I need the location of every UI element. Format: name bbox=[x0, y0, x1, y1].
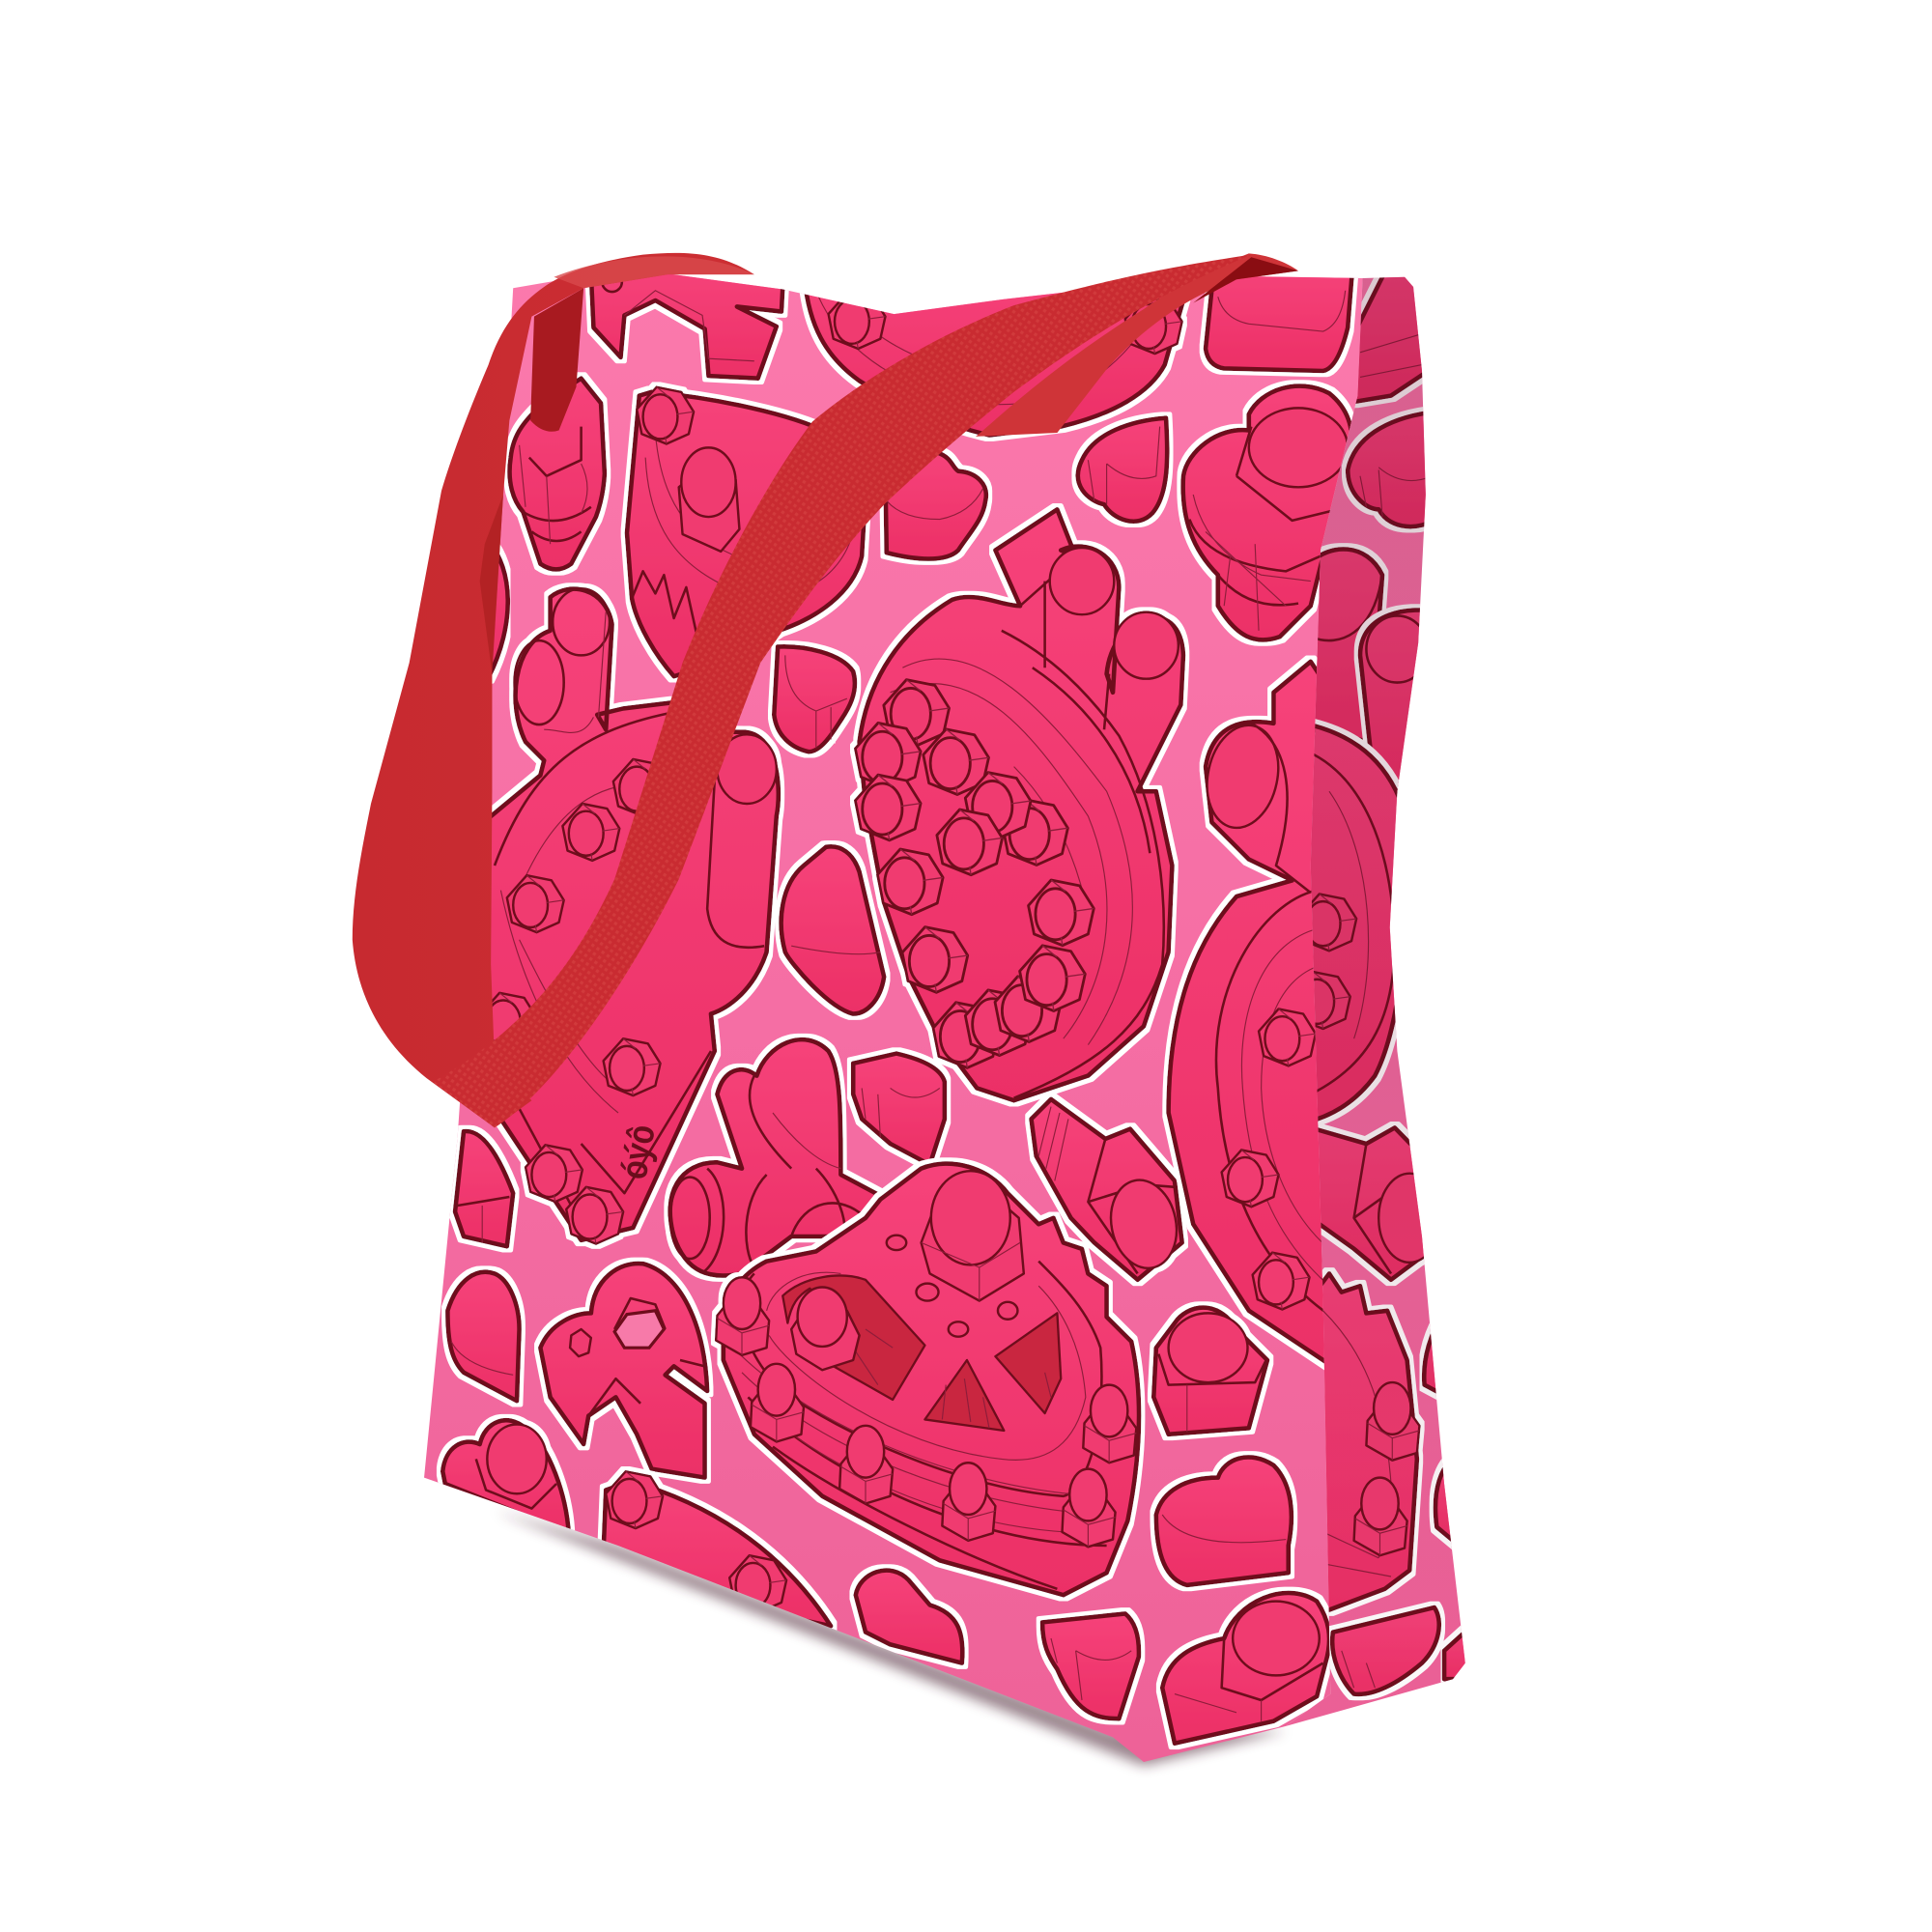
sticker: assembly pipes bbox=[670, 1039, 880, 1276]
side sticker: small heart bbox=[1348, 412, 1435, 526]
panel: bag front fabric bbox=[424, 269, 1363, 1762]
sticker: bottom big heart fragment bbox=[604, 1471, 831, 1626]
sticker: heart under strap bbox=[885, 452, 986, 559]
sticker: small heart lower center bbox=[853, 1054, 945, 1165]
side sticker: right edge pieces bbox=[1424, 1298, 1459, 1546]
sticker: bolt on heart top right bbox=[1183, 386, 1352, 639]
sticker: large gear heart with nut bbox=[627, 387, 866, 676]
pattern: side panel stickers bbox=[1293, 272, 1471, 1694]
sticker: hex bolt bbox=[1032, 1099, 1184, 1280]
sticker: hex head lower right bbox=[1153, 1308, 1267, 1435]
side sticker: bolt bbox=[1311, 1127, 1449, 1280]
strap: dark underside at top right bbox=[1193, 257, 1298, 303]
strap: inner fold shading bbox=[480, 495, 503, 674]
panel: bag side gusset bbox=[1286, 277, 1465, 1726]
side sticker: big heart wrap bbox=[1293, 724, 1407, 1122]
sticker: top right heart block bbox=[1206, 266, 1352, 371]
side sticker: bottom corner piece bbox=[1444, 1626, 1471, 1679]
sticker: heart lower right bbox=[1156, 1457, 1292, 1585]
sticker: bolt heart bottom right bbox=[1162, 1593, 1329, 1744]
sticker: top heart with nuts bbox=[800, 292, 1190, 441]
sticker: small heart center left bbox=[774, 646, 855, 752]
sticker: heart bottom left bbox=[447, 1272, 520, 1401]
side sticker: second pipe bbox=[1360, 610, 1440, 791]
side sticker: upper pipe bbox=[1311, 549, 1382, 742]
strap: left outer band bbox=[353, 253, 754, 1127]
side sticker: top bolt bbox=[1348, 272, 1428, 402]
side sticker: bottom heart bbox=[1332, 1607, 1439, 1694]
icon: inner strap tail bbox=[530, 288, 583, 432]
sticker: heart bottom centre bbox=[1042, 1613, 1139, 1719]
sticker: center top large heart with bolts bbox=[855, 509, 1183, 1100]
sticker: left edge sliver bbox=[489, 542, 508, 677]
sticker: bolt heart bottom left bbox=[442, 1420, 569, 1533]
side panel shading bbox=[1286, 277, 1465, 1726]
side sticker: gear heart bbox=[1311, 1273, 1419, 1610]
sticker: small heart center bbox=[781, 846, 884, 1014]
ground shadow under bag bbox=[495, 1511, 1286, 1766]
sticker: heart bottom bbox=[856, 1571, 962, 1663]
sticker: left bolt heart bbox=[510, 379, 605, 569]
sticker: hex nut left bbox=[455, 1131, 513, 1246]
sticker: wrench bottom left bbox=[540, 1264, 707, 1478]
sticker: bottom center heart with windows and nuts bbox=[716, 1164, 1139, 1595]
sticker: top wrench bbox=[585, 274, 789, 384]
pattern: front panel stickers bbox=[442, 266, 1352, 1744]
sticker: small heart top bbox=[1078, 418, 1167, 522]
strap: rear band hanging bbox=[976, 253, 1298, 437]
sticker: big heart right on front bbox=[1169, 662, 1348, 1373]
strap: main front band bbox=[433, 255, 1251, 1127]
sticker: left heart with pipes and logo bbox=[476, 588, 779, 1244]
strap: worn highlight along top edge bbox=[554, 256, 754, 288]
logo mark: óýô bbox=[613, 1122, 664, 1182]
